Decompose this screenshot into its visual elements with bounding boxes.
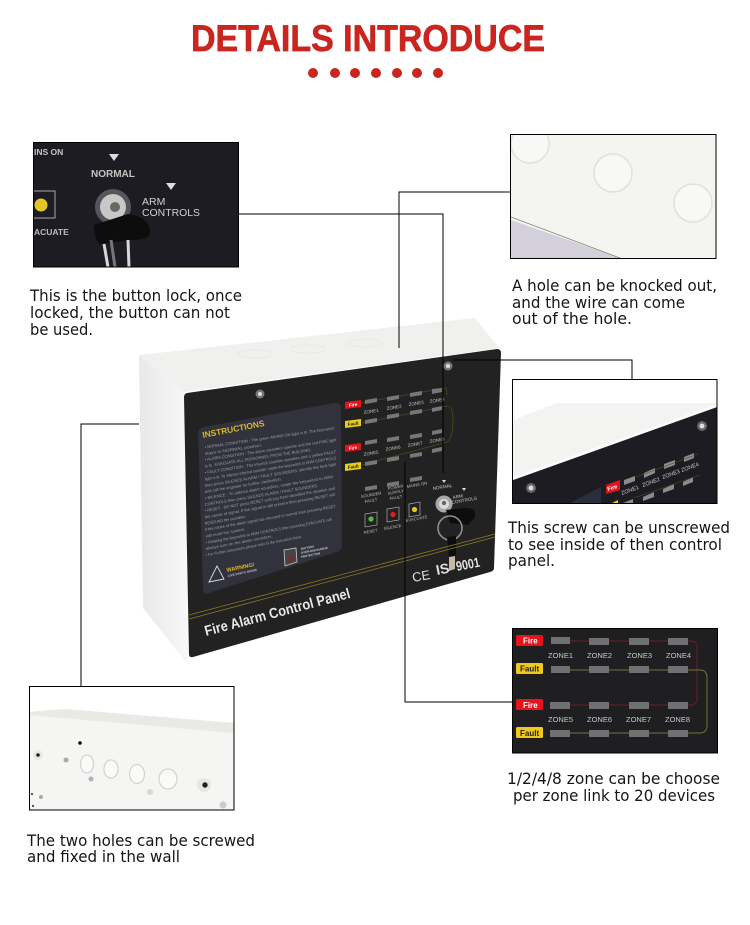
key switch with key: ARM	[452, 493, 463, 500]
fire alarm control panel device	[139, 318, 501, 661]
zone labels: ZONE8	[665, 715, 690, 724]
device top face	[139, 318, 500, 393]
caption: screw: to see inside of then control	[508, 535, 722, 554]
instructions panel: and call the engineer for further clarification.	[204, 476, 282, 494]
zone labels	[548, 651, 691, 724]
panel: button lock photo: NORMAL	[91, 169, 135, 180]
panel: screw photo: ZONE2	[642, 477, 661, 489]
caption: button lock: locked, the button can not	[30, 303, 230, 322]
fire and fault tags: Fault	[347, 420, 359, 427]
panel: knock-out holes photo	[510, 125, 716, 258]
zone labels: ZONE4	[666, 651, 691, 660]
status lights and buttons: FAULT	[389, 494, 403, 501]
caption: zones: per zone link to 20 devices	[513, 786, 715, 805]
caption: screw: panel.	[508, 551, 555, 570]
product name: Fire Alarm Control Panel	[203, 586, 352, 640]
zone labels: ZONE8	[429, 436, 445, 444]
battery icon: PROTECTION	[300, 551, 321, 559]
panel: button lock photo: INS ON	[34, 147, 63, 157]
zone labels: ZONE6	[385, 444, 401, 452]
caption: button lock: This is the button lock, once	[29, 286, 242, 305]
zone labels	[363, 397, 445, 457]
fire and fault tags: Fault	[347, 463, 359, 470]
zone labels: ZONE1	[548, 651, 573, 660]
panel: button lock photo: ARM	[142, 196, 165, 208]
instructions panel: always turn on the alarm sounders.	[205, 533, 273, 551]
battery icon: BATTERY	[300, 544, 315, 551]
caption: knock-out hole: out of the hole.	[512, 309, 632, 328]
caption: wall holes: The two holes can be screwed	[26, 831, 255, 850]
instructions panel: INSTRUCTIONS	[201, 418, 266, 440]
instructions panel: • SILENCE - To silence alarm sounders, rotate the keyswitch to ARM	[204, 474, 333, 500]
caption: zones: 1/2/4/8 zone can be choose	[507, 769, 720, 788]
status lights and buttons: SOUNDER	[360, 490, 382, 499]
title dots	[308, 68, 443, 78]
zone labels: ZONE2	[587, 651, 612, 660]
panel: screw photo: ZONE4	[681, 462, 700, 474]
certification marks: IS	[435, 560, 451, 578]
panel: wall holes photo	[29, 686, 234, 810]
zone LEDs	[365, 388, 442, 466]
leader line: knock-out hole	[399, 192, 511, 348]
leader line: button lock	[239, 214, 443, 473]
caption: screw	[507, 518, 730, 570]
leader line: wall holes	[81, 424, 139, 686]
instructions panel: WARNING!	[226, 562, 255, 574]
key switch with key: NORMAL	[432, 483, 453, 491]
instructions panel: RESOUND the sounders.	[204, 514, 247, 526]
instructions panel: is lit. -EVACUATE ALL PERSONNEL FROM THE BUILDING.	[204, 447, 312, 468]
fire and fault tags: Fire	[348, 445, 358, 451]
status lights and buttons: POWER	[387, 483, 404, 491]
zone labels: ZONE5	[548, 715, 573, 724]
caption: knock-out hole: and the wire can come	[512, 293, 685, 312]
device front panel	[184, 349, 501, 657]
battery icon: OVER-DISCHARGE	[300, 546, 328, 555]
panel: screw photo: ZONE3	[662, 469, 681, 481]
leader line: zones	[405, 462, 512, 702]
caption: zones	[507, 769, 720, 805]
panel: button lock photo	[20, 142, 239, 267]
panel: button lock photo: ACUATE	[34, 227, 69, 237]
instructions panel: LIVE PARTS INSIDE	[227, 568, 258, 578]
certification marks	[411, 555, 482, 585]
panel: screw photo: Fire	[607, 484, 618, 493]
zone labels: ZONE7	[407, 440, 423, 448]
device side face	[139, 355, 189, 661]
caption: screw: This screw can be unscrewed	[507, 518, 730, 537]
instructions panel: then press SILENCE ALARM / FAULT SOUNDERS, identify the fault light	[204, 461, 337, 488]
instructions panel: stays in NORMAL position.	[204, 442, 263, 456]
fire and fault tags: Fire	[523, 701, 538, 710]
fire and fault tags	[516, 635, 543, 738]
instructions panel: • RESET - DO NOT press RESET until you have identified the situation and	[204, 486, 335, 513]
zone labels: ZONE4	[429, 397, 445, 404]
instructions panel	[198, 403, 342, 594]
fire link line	[570, 641, 697, 705]
instructions panel: CONTROLS then press SILENCE ALARM / FAULT SOUNDERS.	[204, 483, 319, 507]
panel: screw photo: ZONE1	[621, 485, 640, 497]
fire and fault tags	[345, 400, 361, 471]
battery icon	[284, 544, 328, 566]
caption: knock-out hole: A hole can be knocked out,	[512, 276, 717, 295]
instructions panel: will reset the system.	[205, 526, 246, 538]
instructions panel: • NORMAL CONDITION - The green MAINS ON light is lit. The keyswitch	[204, 425, 335, 449]
zone labels: ZONE7	[626, 715, 651, 724]
panel: zone indicators photo	[512, 628, 718, 753]
warning triangle icon	[209, 566, 224, 582]
status lights and buttons: SILENCE	[383, 523, 402, 531]
status lights and buttons: MAINS ON	[406, 480, 428, 489]
key switch with key	[432, 480, 477, 571]
zone labels: ZONE5	[363, 449, 379, 457]
caption: wall holes: and fixed in the wall	[27, 847, 180, 866]
zone indicator block	[345, 388, 453, 471]
fault link line	[570, 670, 707, 733]
status lights and buttons: EVACUATE	[405, 514, 428, 523]
caption: wall holes	[26, 831, 255, 866]
panel: button lock photo: CONTROLS	[142, 207, 200, 219]
caption: button lock	[29, 286, 242, 339]
zone LEDs	[550, 637, 688, 737]
panel: screw photo	[512, 380, 717, 504]
zone labels: ZONE1	[363, 408, 379, 415]
status lights and buttons: FAULT	[364, 497, 378, 504]
fire and fault tags: Fire	[348, 402, 358, 408]
instructions panel: If the cause of the alarm signal has returned to normal then pressing RESET	[204, 503, 337, 532]
instructions panel: • For Further instructions please refer to the instruction book.	[205, 534, 302, 557]
zone labels: ZONE6	[587, 715, 612, 724]
zone labels: ZONE3	[408, 400, 424, 407]
mounting screws	[256, 362, 452, 398]
status lights and buttons: RESET	[363, 528, 378, 535]
instructions panel: • ALARM CONDITION - The alarm sounders operate and the red FIRE light	[204, 437, 338, 462]
instructions panel: • FAULT CONDITION - The internal sounder operates and a yellow FAULT	[204, 449, 337, 475]
status lights and buttons	[360, 476, 428, 535]
instructions panel: the cause of signal. If the signal is still present then pressing RESET will	[204, 492, 335, 519]
fire and fault tags: Fault	[520, 664, 539, 674]
fire and fault tags: Fault	[520, 729, 539, 738]
title: DETAILS INTRODUCE	[191, 18, 545, 59]
zone labels: ZONE3	[627, 651, 652, 660]
status lights and buttons: SUPPLY	[387, 488, 404, 496]
fire and fault tags: Fire	[523, 636, 538, 646]
gold stripes	[189, 534, 495, 619]
caption: button lock: be used.	[30, 320, 93, 339]
instructions panel: • Rotating the keyswitch to ARM CONTROLS then pressing EVACUATE will	[205, 517, 332, 545]
key switch with key: CONTROLS	[451, 496, 477, 505]
zone labels: ZONE2	[386, 404, 402, 411]
leader line: screw	[453, 360, 632, 379]
certification marks: 9001	[455, 555, 482, 574]
caption: knock-out hole	[512, 276, 717, 328]
certification marks: CE	[411, 567, 432, 585]
instructions panel: light is lit. To Silence internal sounder rotate the keyswitch to ARM CONTROLS	[204, 455, 337, 481]
